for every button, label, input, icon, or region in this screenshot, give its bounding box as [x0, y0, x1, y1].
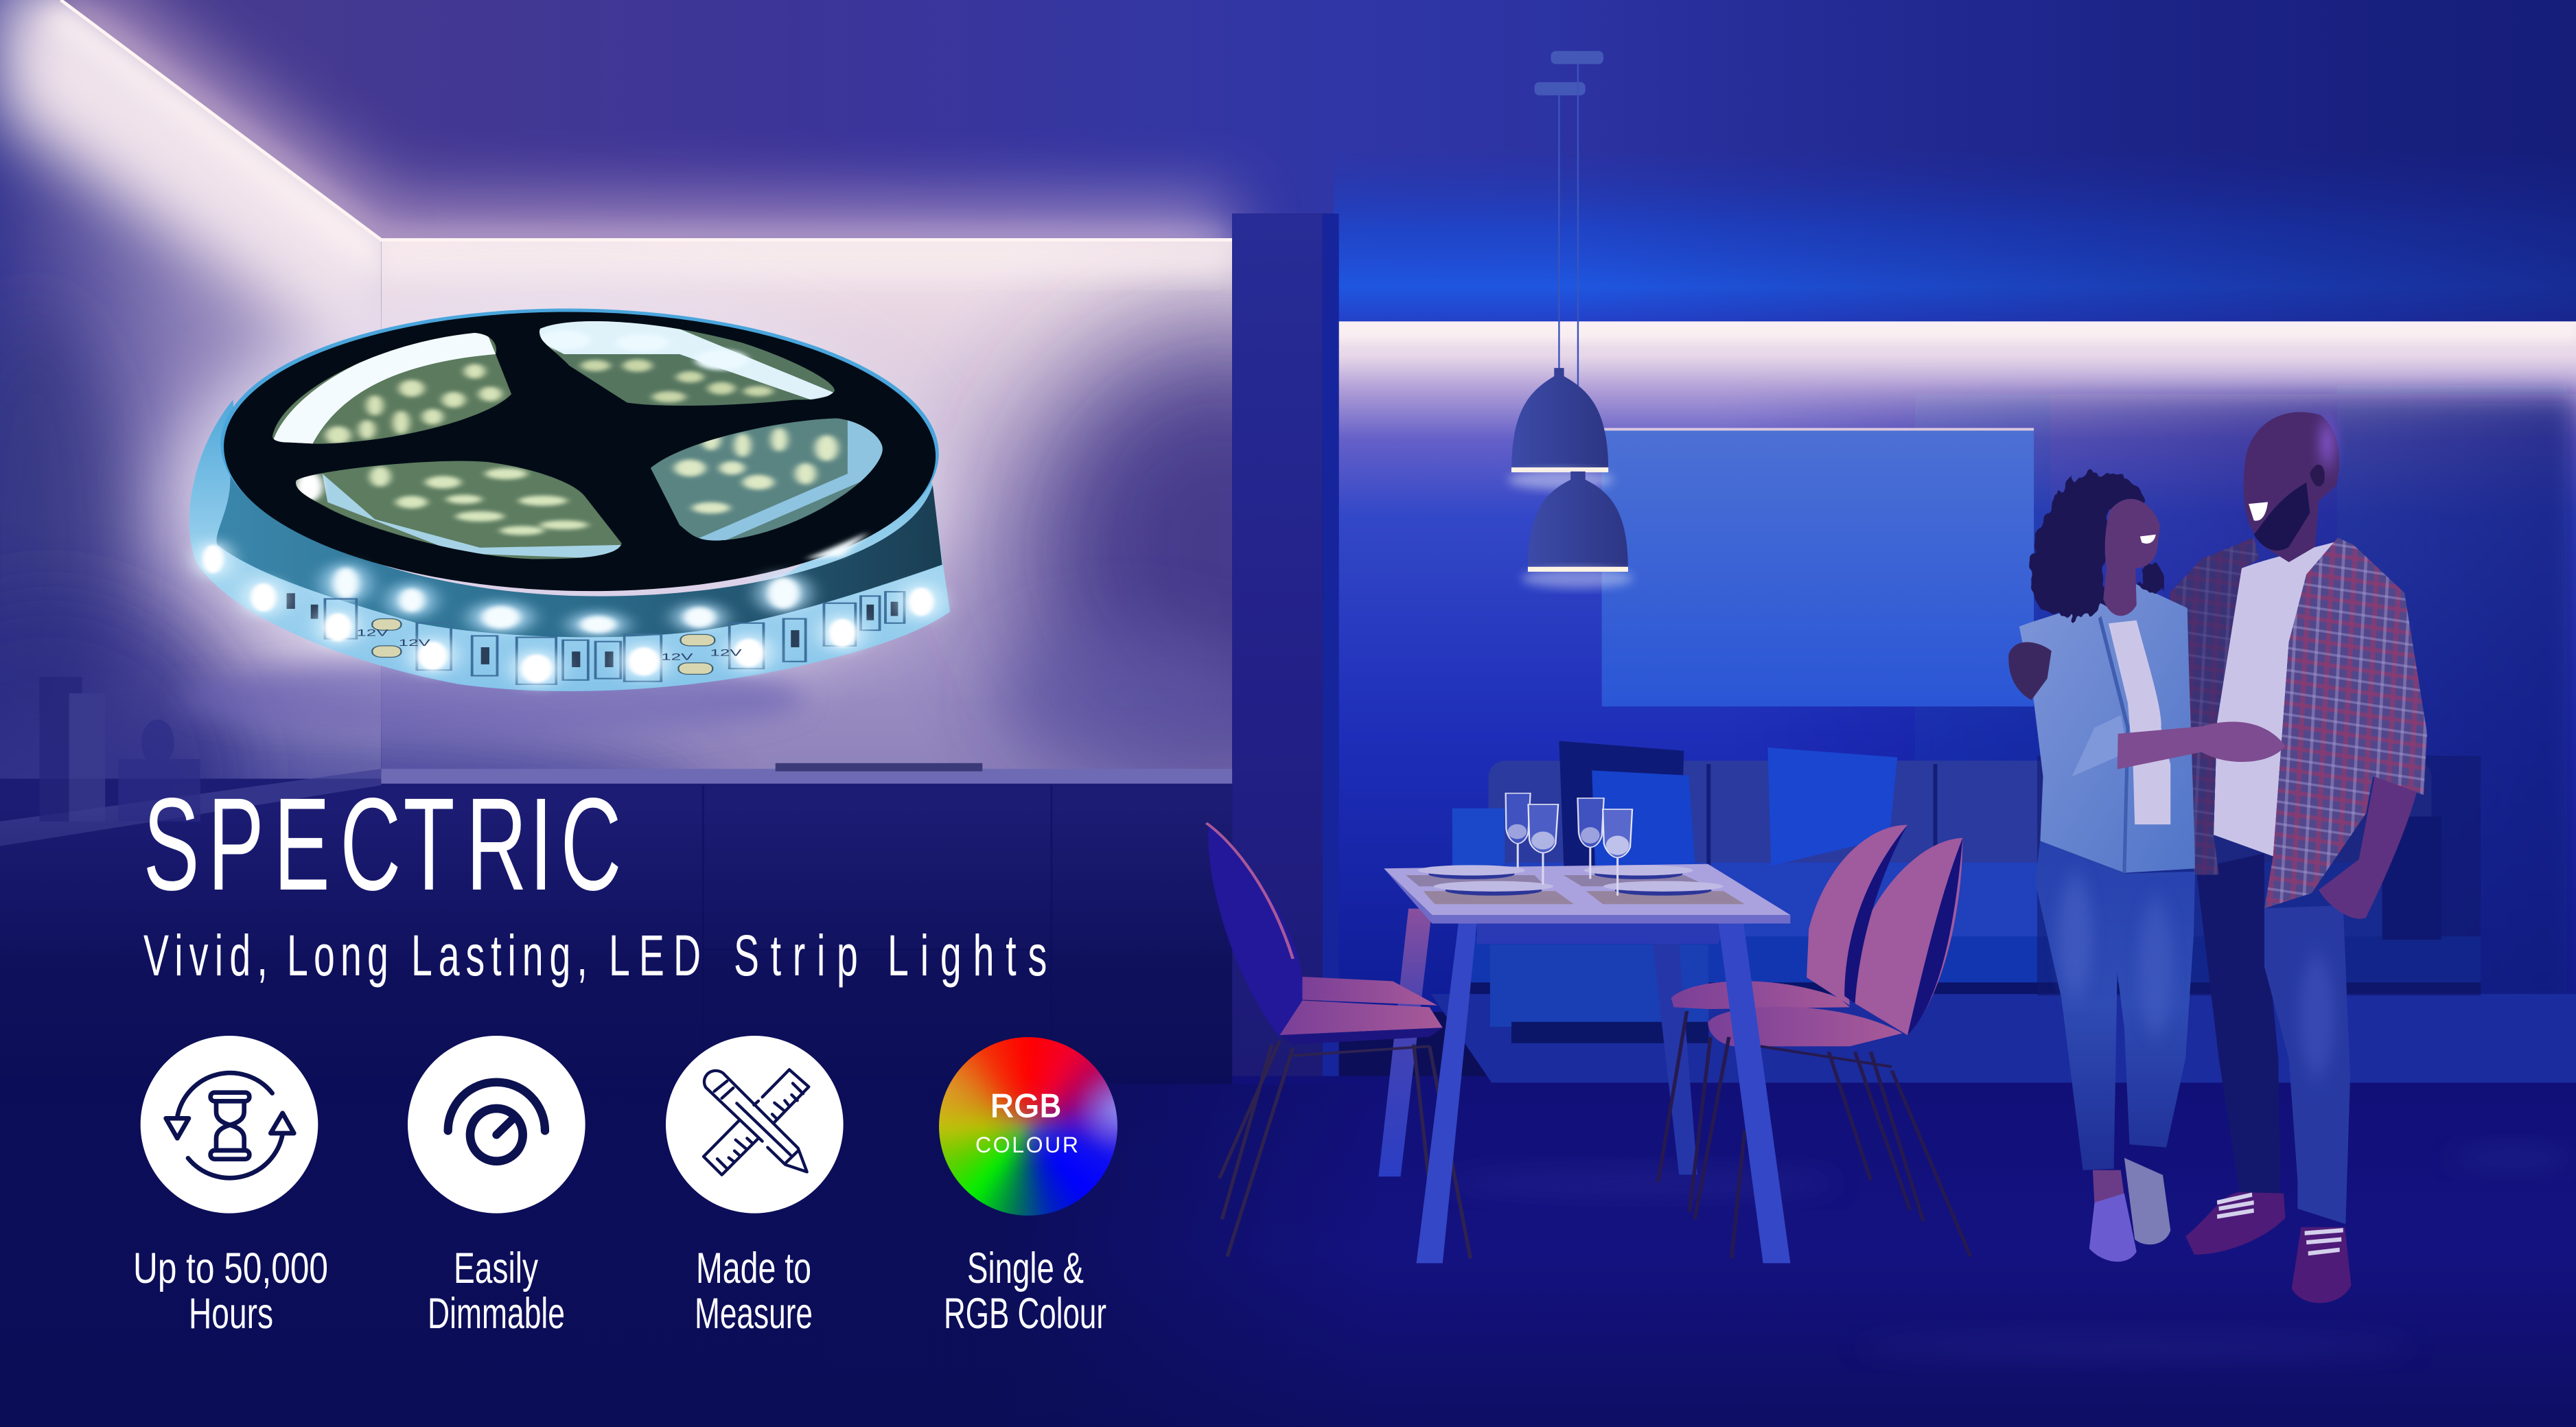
- right chairs: [1658, 825, 1971, 1258]
- reel window: top right: [533, 312, 848, 408]
- cabinet: [0, 763, 1232, 1107]
- subtitle: Lasting,: [411, 925, 588, 988]
- subtitle: Strip: [734, 925, 858, 988]
- painting on wall: [1602, 428, 2034, 706]
- man's tee: [2214, 541, 2340, 857]
- left side dim overlay behind text: [0, 805, 1232, 1084]
- right pillow: [1767, 747, 1897, 866]
- subtitle: Lights: [887, 925, 1047, 988]
- floor: [0, 1076, 2576, 1427]
- table top and front legs: [1384, 864, 1790, 1263]
- strip voltage markings: 12V: [710, 647, 742, 658]
- place settings: [1406, 865, 1745, 904]
- label: up to 50,000 hours: [133, 1244, 328, 1338]
- title: SPECTRIC: [143, 771, 621, 918]
- man's arm and hand: [2319, 776, 2417, 919]
- rug: [1431, 994, 2576, 1082]
- woman's forearm: [2117, 722, 2286, 769]
- right cove light line: [1334, 321, 2576, 325]
- woman's face: [2103, 499, 2160, 616]
- icon: rgb colour wheel: [939, 1037, 1117, 1216]
- pendant lamps: [1508, 51, 1633, 588]
- icon: rgb colour wheel: COLOUR: [975, 1133, 1078, 1157]
- label: easily dimmable: [428, 1244, 565, 1338]
- back wall with light wash: [381, 242, 1232, 769]
- sofa: [1452, 756, 2481, 1043]
- subtitle: Vivid,: [143, 925, 268, 988]
- icon: hourglass with cycle arrows: [141, 1036, 318, 1214]
- label: easily dimmable: Dimmable: [428, 1290, 565, 1338]
- woman's sneakers and ankles: [2089, 1158, 2170, 1262]
- man's plaid shirt: [2170, 537, 2427, 908]
- dining table and chairs: [1206, 793, 1971, 1263]
- man's jeans: [2196, 853, 2350, 1224]
- reel glow on wall: [164, 296, 936, 706]
- outer strip chips: [325, 592, 905, 684]
- woman's jeans: [2035, 841, 2195, 1170]
- right wall: [1334, 321, 2576, 1012]
- reel shadow: [181, 659, 805, 738]
- outer strip: [189, 399, 950, 691]
- inner LED ribbon: [217, 456, 942, 637]
- inner ribbon LEDs: [334, 532, 869, 633]
- strip voltage markings: 12V: [356, 627, 388, 638]
- label: made to measure: Made to: [696, 1244, 811, 1292]
- label: up to 50,000 hours: Up to 50,000: [133, 1244, 328, 1292]
- wine glasses: [1506, 793, 1632, 896]
- icon: dimmer dial: [408, 1036, 585, 1214]
- strip voltage markings: 12V: [661, 652, 693, 662]
- strip voltage markings: 12V: [399, 638, 430, 648]
- woman's hair: [2030, 473, 2164, 617]
- label: single and rgb colour: Single &: [967, 1244, 1084, 1292]
- outer strip LED glow: [195, 540, 942, 687]
- woman's tee: [2109, 620, 2170, 824]
- inner ribbon LED glow: [323, 564, 810, 637]
- left side wall: [0, 0, 382, 778]
- label: single and rgb colour: RGB Colour: [944, 1290, 1106, 1338]
- shelf objects: [39, 677, 200, 822]
- icon: pencil and ruler: [666, 1036, 844, 1214]
- ceiling: [0, 0, 2576, 322]
- subtitle: [143, 925, 1047, 988]
- reel window: bottom left: [291, 456, 627, 562]
- man's head: [2244, 412, 2339, 562]
- couple: [2008, 412, 2427, 1303]
- strip voltage markings: [356, 627, 742, 662]
- rear table legs: [1378, 909, 1697, 1176]
- label: made to measure: Measure: [695, 1290, 813, 1338]
- lower left wall shadow: [0, 577, 712, 778]
- label: single and rgb colour: [944, 1244, 1106, 1338]
- LED strip reel: [189, 299, 952, 691]
- wall column: [1232, 213, 1339, 1101]
- woman's jacket: [2019, 583, 2195, 873]
- label: easily dimmable: Easily: [454, 1244, 538, 1292]
- reel window: top left: [264, 329, 517, 448]
- label: made to measure: [695, 1244, 813, 1338]
- label: up to 50,000 hours: Hours: [189, 1290, 273, 1338]
- solder pads: [372, 619, 715, 674]
- subtitle: LED: [609, 925, 701, 988]
- man's shoes: [2185, 1192, 2352, 1303]
- icon: rgb colour wheel: RGB: [990, 1087, 1061, 1124]
- reel window: bottom right: [648, 417, 890, 542]
- blue pillow: [1592, 771, 1695, 871]
- man's hand on shoulder: [2008, 642, 2052, 700]
- cove light line: left and back: [61, 0, 1232, 240]
- black flange: [211, 302, 949, 601]
- outer strip LEDs: [202, 545, 933, 683]
- dark pillow: [1559, 741, 1684, 887]
- left chair: [1206, 823, 1470, 1258]
- subtitle: Long: [287, 925, 388, 988]
- flange blue rim: [207, 299, 952, 599]
